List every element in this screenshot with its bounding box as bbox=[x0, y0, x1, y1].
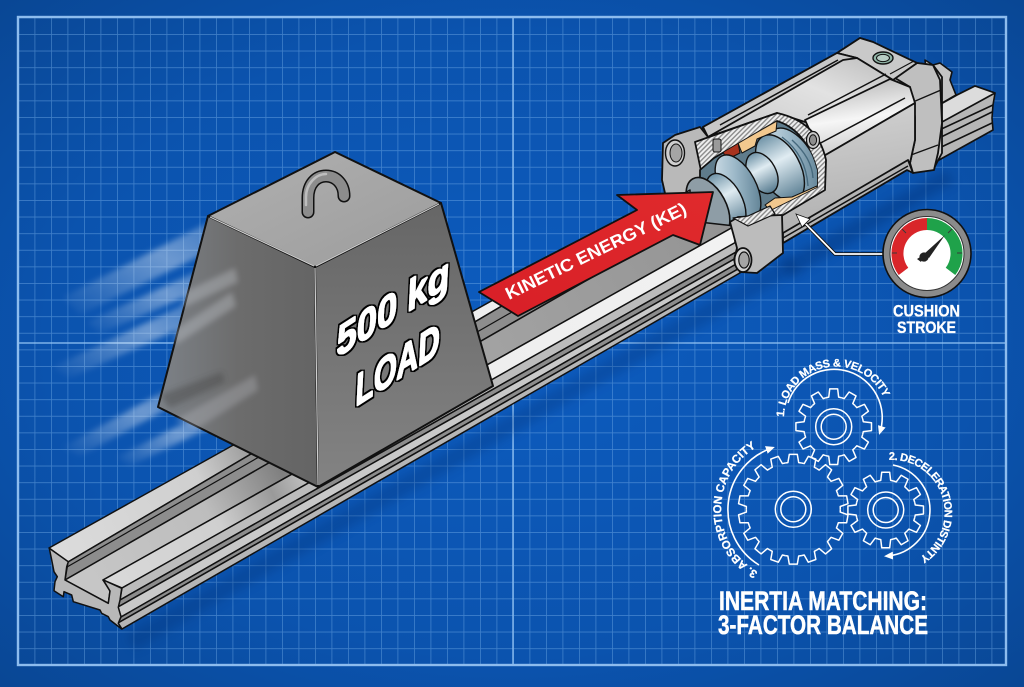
rail drop shadow bbox=[125, 255, 800, 650]
front cap face bbox=[662, 127, 740, 240]
cushion collar bbox=[706, 148, 770, 226]
cushion seal lower bbox=[765, 186, 817, 212]
title: inertia matching bbox=[718, 586, 928, 640]
cylinder silhouette bbox=[700, 38, 942, 245]
top tie strip bbox=[703, 53, 857, 137]
gauge dial bbox=[883, 210, 971, 298]
gear cycle labels: 2. DECELERATION DISTINTY bbox=[889, 452, 952, 564]
cylinder body lower face bbox=[765, 103, 915, 235]
cylinder bottom strip bbox=[783, 160, 913, 243]
cutaway interior bbox=[700, 121, 817, 225]
kinetic energy arrow bbox=[479, 192, 713, 316]
rail left head top bbox=[49, 190, 690, 562]
rail side grooves bbox=[120, 237, 745, 600]
rail channel floor bbox=[65, 221, 735, 603]
cushion stroke label bbox=[893, 302, 960, 337]
weight top face bbox=[208, 152, 441, 267]
gear cycle labels bbox=[713, 358, 952, 578]
cylinder body upper face bbox=[708, 58, 893, 137]
rail end profile bbox=[49, 548, 122, 629]
piston collar bbox=[698, 167, 754, 235]
mounting bolt bbox=[713, 139, 721, 152]
rear end cap bbox=[895, 63, 942, 173]
load label: 500 kg bbox=[335, 247, 451, 368]
leader line bbox=[799, 217, 885, 254]
three meshing gears bbox=[738, 389, 923, 564]
linear rail bbox=[49, 190, 745, 629]
cushion stroke label: CUSHION bbox=[893, 302, 960, 320]
gear cycle labels: 3. ABSORPTION CAPACITY bbox=[713, 440, 757, 578]
lifting hook bbox=[306, 174, 344, 212]
gear 2 bbox=[848, 472, 923, 548]
gear cycle arrows bbox=[728, 369, 930, 565]
load label: LOAD bbox=[354, 311, 441, 417]
500 kg load weight bbox=[158, 152, 493, 487]
red seals bbox=[723, 144, 740, 156]
gauge needle bbox=[917, 235, 945, 262]
piston internals bbox=[723, 121, 817, 209]
hatched cutaway shell bbox=[695, 113, 826, 227]
title: inertia matching: INERTIA MATCHING: bbox=[719, 586, 927, 616]
green zone bbox=[927, 224, 957, 271]
rear left head tab bbox=[925, 60, 956, 110]
motion blur over weight bbox=[160, 268, 258, 430]
cylinder drop shadow bbox=[780, 170, 955, 278]
kinetic energy arrow: KINETIC ENERGY (KE) bbox=[502, 198, 690, 304]
weight left face bbox=[158, 216, 318, 487]
rod end face bbox=[677, 170, 739, 244]
gear cycle labels: 1. LOAD MASS & VELOCITY bbox=[776, 358, 890, 416]
title: inertia matching: 3-FACTOR BALANCE bbox=[718, 610, 928, 640]
gear 1 bbox=[796, 389, 871, 464]
rail right head top bbox=[103, 226, 735, 588]
cushion stroke gauge bbox=[796, 210, 971, 298]
red zone bbox=[897, 224, 927, 271]
body grooves bbox=[720, 60, 908, 238]
cushion stroke label: STROKE bbox=[897, 318, 956, 337]
rear rail section bbox=[925, 60, 995, 165]
cylinder body highlight band bbox=[805, 79, 915, 157]
load label bbox=[335, 247, 451, 417]
rear right head bbox=[930, 86, 995, 165]
tie rod hole bbox=[806, 132, 820, 148]
top mounting plate with port bbox=[837, 38, 917, 80]
weight right face bbox=[315, 203, 493, 487]
front cap lower bbox=[730, 206, 783, 273]
piston rod shaft bbox=[739, 147, 785, 199]
port hole in front cap bbox=[666, 140, 684, 166]
motion streaks behind load bbox=[53, 223, 212, 466]
pneumatic cylinder bbox=[662, 38, 942, 245]
gear 3 bbox=[738, 454, 849, 564]
cushion seal upper bbox=[738, 121, 777, 153]
rail left head inner wall bbox=[65, 195, 690, 580]
